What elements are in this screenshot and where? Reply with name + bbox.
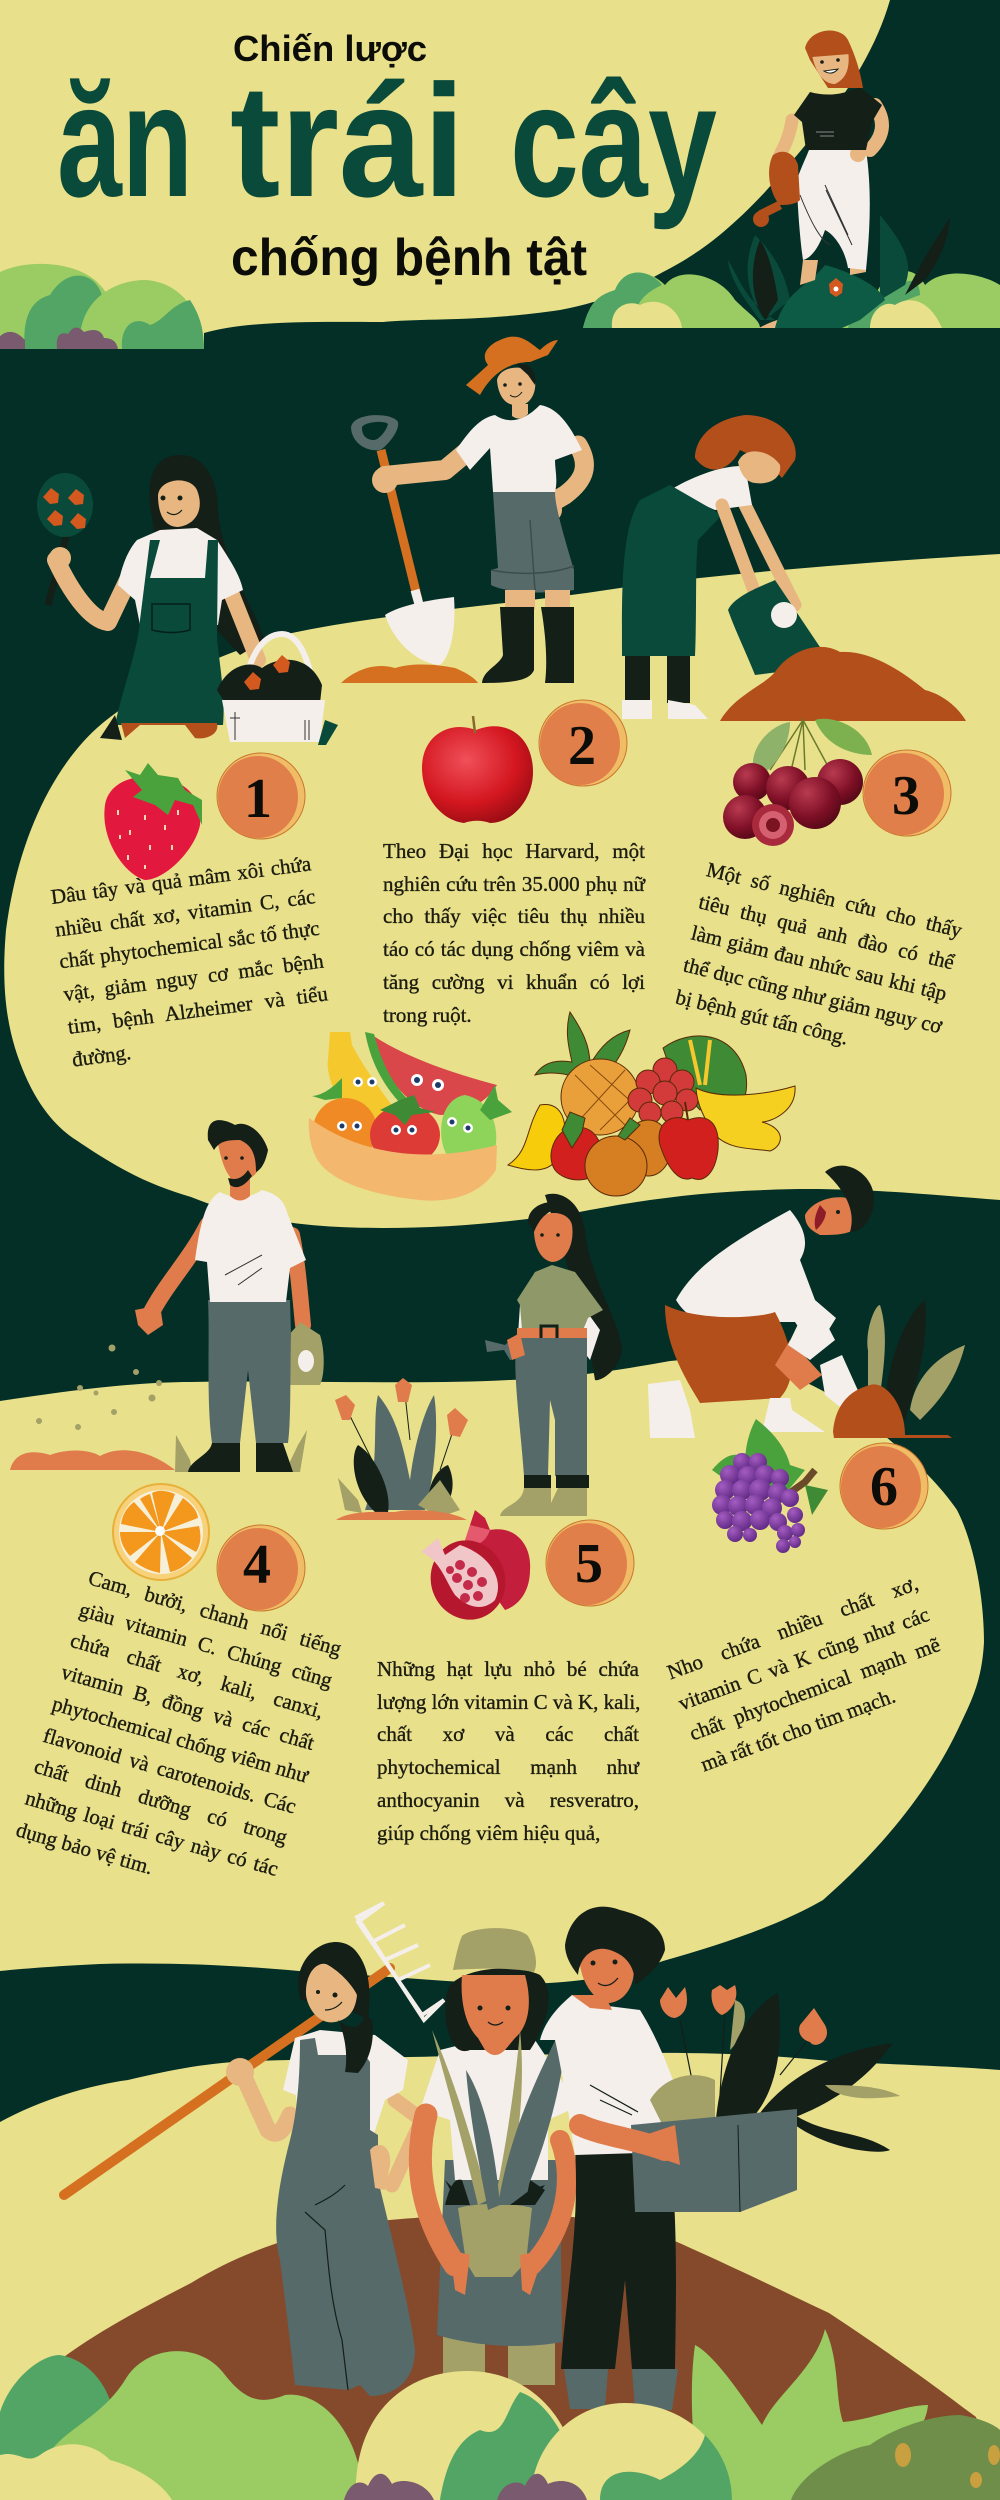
text block 3: cherry: làm giảm đau nhức sau khi tập (689, 921, 949, 1006)
mango (508, 1104, 565, 1170)
watering can (769, 152, 800, 205)
big light bush (45, 2351, 363, 2500)
right arm (548, 445, 584, 505)
center person apron (437, 2160, 562, 2346)
background plants (728, 215, 908, 320)
socks and shoes (625, 656, 690, 703)
right man shirt (540, 1995, 686, 2155)
watermelon behind (663, 1036, 747, 1110)
basket (245, 634, 314, 700)
shirt (195, 1190, 306, 1302)
text block 6: grapes (664, 1571, 943, 1776)
text block 2: apple: tăng cường vi khuẩn có lợi (383, 970, 645, 994)
near arm (722, 505, 765, 620)
woman bending over bag (622, 415, 966, 721)
left woman overalls (276, 2038, 415, 2396)
text block 5: pomegranate: phytochemical mạnh như (377, 1755, 639, 1779)
shirt (676, 1210, 836, 1352)
woman watering plants (728, 31, 950, 328)
center person legs (443, 2335, 555, 2385)
number circle 4 (217, 1525, 305, 1611)
mound (833, 1384, 952, 1438)
title: ăn trái cây: ăn (57, 51, 193, 230)
text block 4: citrus: dụng bảo vệ tim. (14, 1817, 156, 1879)
shirt (670, 466, 752, 510)
center plant (445, 2180, 545, 2205)
icon: apple (422, 716, 533, 823)
tomato (370, 1105, 440, 1165)
man with shovel and straw hat (341, 337, 584, 683)
red apple right (659, 1118, 718, 1179)
plants (867, 1305, 885, 1395)
icon: strawberry (104, 763, 202, 880)
left arm (385, 445, 475, 476)
pineapple (561, 1059, 639, 1135)
leafy plant (692, 2329, 928, 2500)
icon: pomegranate (420, 1510, 530, 1630)
pot (458, 2204, 532, 2277)
orange front (585, 1136, 647, 1196)
center person hat (453, 1928, 536, 1972)
icon: orange slice (113, 1484, 209, 1580)
text block 6: grapes: chất phytochemical mạnh mẽ (686, 1633, 943, 1746)
left woman shirt (283, 2030, 408, 2140)
lower leg (775, 1340, 822, 1390)
title: Chiến lược: Chiến lược (233, 28, 427, 69)
trousers (622, 485, 722, 656)
lower yellow blob (0, 1359, 984, 1984)
trousers (208, 1300, 291, 1443)
text block 3: cherry: bị bệnh gút tấn công. (673, 984, 851, 1049)
face (158, 480, 200, 527)
text block 5: pomegranate: Những hạt lựu nhỏ bé chứa (377, 1657, 639, 1681)
bag (281, 1322, 324, 1385)
text block 1: strawberry: nhiều chất xơ, vitamin C, các (54, 884, 317, 941)
text block 2: apple: táo có tác dụng chống viêm và (383, 937, 645, 961)
title: chống bệnh tật: chống bệnh tật (231, 229, 587, 287)
rake head (357, 1903, 444, 2020)
right man arm and hand (580, 2125, 665, 2150)
center person hair (445, 1968, 549, 2051)
text block 1: strawberry: tim, bệnh Alzheimer và tiểu (66, 981, 329, 1039)
mound (10, 1450, 175, 1470)
pineapple leaves (535, 1012, 630, 1080)
text block 5: pomegranate: chất xơ và các chất (377, 1722, 639, 1746)
dirt mound (720, 647, 966, 721)
text block 2: apple: trong ruột. (383, 1003, 472, 1027)
left woman hand and arm (243, 2075, 290, 2133)
icon: grapes (712, 1419, 828, 1553)
pear (441, 1095, 496, 1170)
text block 6: grapes: Nho chứa nhiều chất xơ, (664, 1571, 921, 1684)
tulips (680, 2010, 812, 2095)
center person face (462, 1975, 529, 2055)
hair (208, 1120, 268, 1172)
seeds (36, 1344, 162, 1430)
far arm (745, 505, 795, 605)
face (738, 451, 780, 483)
text block 4: citrus: flavonoid và carotenoids. Các (41, 1723, 299, 1818)
fruit bowl with smiling fruits (309, 1032, 512, 1201)
right arm (232, 595, 258, 660)
boots (500, 1488, 587, 1516)
center hands (450, 2250, 470, 2295)
long hair (545, 1194, 622, 1380)
text block 2: apple: nghiên cứu trên 35.000 phụ nữ (383, 872, 645, 896)
black top (794, 87, 882, 150)
center person shirt (420, 2040, 570, 2180)
top yellow wave (0, 0, 890, 349)
text block 5: pomegranate: giúp chống viêm hiệu quả, (377, 1821, 600, 1845)
shirt (456, 405, 582, 492)
legs (800, 260, 866, 285)
head (497, 368, 535, 405)
arms (780, 120, 792, 155)
text block 4: citrus: Cam, bưởi, chanh nổi tiếng (86, 1565, 344, 1661)
neck and face (230, 1170, 250, 1200)
shorts (491, 492, 574, 592)
number circle 5 (546, 1520, 634, 1606)
number circle 6: 6 (870, 1456, 898, 1518)
right man hair (565, 1907, 665, 1985)
text block 4: citrus: vitamin B, đồng và các chất (59, 1660, 317, 1755)
shoes (648, 1380, 695, 1438)
number circle 4: 4 (243, 1534, 271, 1596)
right man head (580, 1941, 634, 2003)
bottom bushes (0, 2329, 1000, 2500)
dark leaves in box (715, 1993, 780, 2130)
number circle 3 (863, 750, 951, 836)
text block 2: apple (383, 839, 646, 1027)
grapes (628, 1058, 698, 1124)
text block 3: cherry: Một số nghiên cứu cho thấy (704, 857, 964, 942)
face (805, 1197, 862, 1235)
text block 4: citrus: chứa chất xơ, kali, canxi, (68, 1628, 326, 1724)
gloves (788, 1315, 835, 1360)
text block 5: pomegranate (377, 1657, 640, 1845)
cuffs (524, 1475, 589, 1488)
left woman hair and face (298, 1942, 369, 2020)
number circle 2 (539, 700, 627, 786)
belt (517, 1328, 587, 1338)
text block 3: cherry: tiêu thụ quả anh đào có thể (696, 889, 957, 974)
mound (341, 665, 478, 683)
flower bouquet (48, 530, 68, 605)
red pepper (551, 1127, 603, 1180)
bushes top right (583, 271, 1000, 328)
banana (328, 1032, 395, 1130)
text block 2: apple: Theo Đại học Harvard, một (383, 839, 645, 863)
orange (313, 1098, 377, 1162)
rake handle (64, 1968, 390, 2195)
shirt (517, 1265, 603, 1330)
man crouching with gloves (648, 1166, 965, 1438)
icon: cherries (723, 719, 872, 846)
text block 1: strawberry: chất phytochemical sắc tố thực (58, 916, 321, 974)
jeans (515, 1338, 587, 1476)
orange back (625, 1120, 671, 1176)
number circle 6 (840, 1443, 928, 1529)
olive bush (791, 2415, 1000, 2500)
feet (121, 723, 217, 738)
number circle 1 (217, 753, 305, 839)
title: ăn trái cây: cây (510, 51, 717, 230)
bottom yellow ground (0, 2053, 1000, 2500)
grass (175, 1430, 307, 1472)
watermelon (372, 1035, 497, 1115)
text block 2: apple: cho thấy việc tiêu thụ nhiều (383, 904, 645, 928)
white sleeves (518, 1305, 600, 1360)
bananas (696, 1086, 795, 1151)
hair (149, 455, 265, 655)
face (534, 1213, 573, 1262)
text block 6: grapes: vitamin C và K cũng như các (675, 1602, 932, 1715)
dark left bush (0, 2355, 115, 2500)
trousers (665, 1305, 791, 1403)
boots (188, 1443, 293, 1472)
face (812, 50, 849, 84)
yellow low bush (0, 2444, 172, 2500)
left arm (56, 560, 128, 622)
bushes top left (0, 264, 204, 349)
text block 4: citrus: giàu vitamin C. Chúng cũng (77, 1597, 335, 1692)
hair (695, 415, 796, 478)
text block 1: strawberry (49, 851, 329, 1071)
woman with flowers and basket (37, 455, 338, 745)
hand with nozzle (485, 1336, 523, 1360)
text block 3: cherry: thể dục cũng như giảm nguy cơ (681, 953, 944, 1038)
text block 1: strawberry: vật, giảm nguy cơ mắc bệnh (62, 949, 325, 1006)
number circle 5: 5 (575, 1533, 603, 1595)
legs (505, 590, 570, 610)
hair (805, 31, 863, 88)
text block 4: citrus: chất dinh dưỡng có trong (32, 1754, 290, 1849)
plant with flowers (335, 1378, 468, 1520)
bag (728, 580, 832, 675)
shovel (351, 415, 398, 450)
center person arms (420, 2115, 455, 2265)
text block 6: grapes: mà rất tốt cho tim mạch. (697, 1684, 899, 1776)
middle yellow blob (4, 554, 1000, 1228)
title: ăn trái cây: trái (230, 51, 465, 230)
box (631, 2109, 797, 2212)
dark foliage and flower (775, 265, 885, 328)
three gardeners (64, 1903, 900, 2410)
right man trousers (561, 2150, 676, 2369)
text block 4: citrus: những loại trái cây này có tác (23, 1786, 281, 1881)
text block 3: cherry (673, 857, 964, 1049)
text block 1: strawberry: Dâu tây và quả mâm xôi chứa (49, 851, 312, 909)
text block 1: strawberry: đường. (71, 1040, 132, 1071)
left woman hand (370, 2145, 390, 2190)
left arm (150, 1225, 208, 1315)
woman in olive shirt (485, 1194, 622, 1516)
second yellow ball (531, 2403, 732, 2500)
text block 4: citrus: phytochemical chống viêm như (50, 1691, 311, 1787)
yellow ball bush (356, 2371, 580, 2500)
number circle 3: 3 (892, 765, 920, 827)
skirt (797, 150, 870, 270)
right arm (292, 1235, 303, 1325)
number circle 2: 2 (568, 715, 596, 777)
fruit pile illustration (508, 1012, 795, 1196)
number circle 1: 1 (244, 768, 272, 830)
brown hill (0, 2214, 1000, 2500)
overalls (115, 540, 224, 725)
right man boots (564, 2369, 678, 2410)
text block 5: pomegranate: lượng lớn vitamin C và K, kali, (377, 1690, 640, 1714)
bowl (309, 1118, 497, 1201)
shirt (118, 528, 243, 625)
boots (482, 607, 534, 683)
title: ăn trái cây (57, 51, 717, 230)
hair (825, 1166, 874, 1232)
man spreading seeds (10, 1120, 324, 1472)
text block 4: citrus (14, 1565, 344, 1881)
text block 5: pomegranate: anthocyanin và resveratro, (377, 1788, 639, 1812)
purple flowers (344, 2474, 587, 2500)
straw hat (466, 337, 558, 395)
